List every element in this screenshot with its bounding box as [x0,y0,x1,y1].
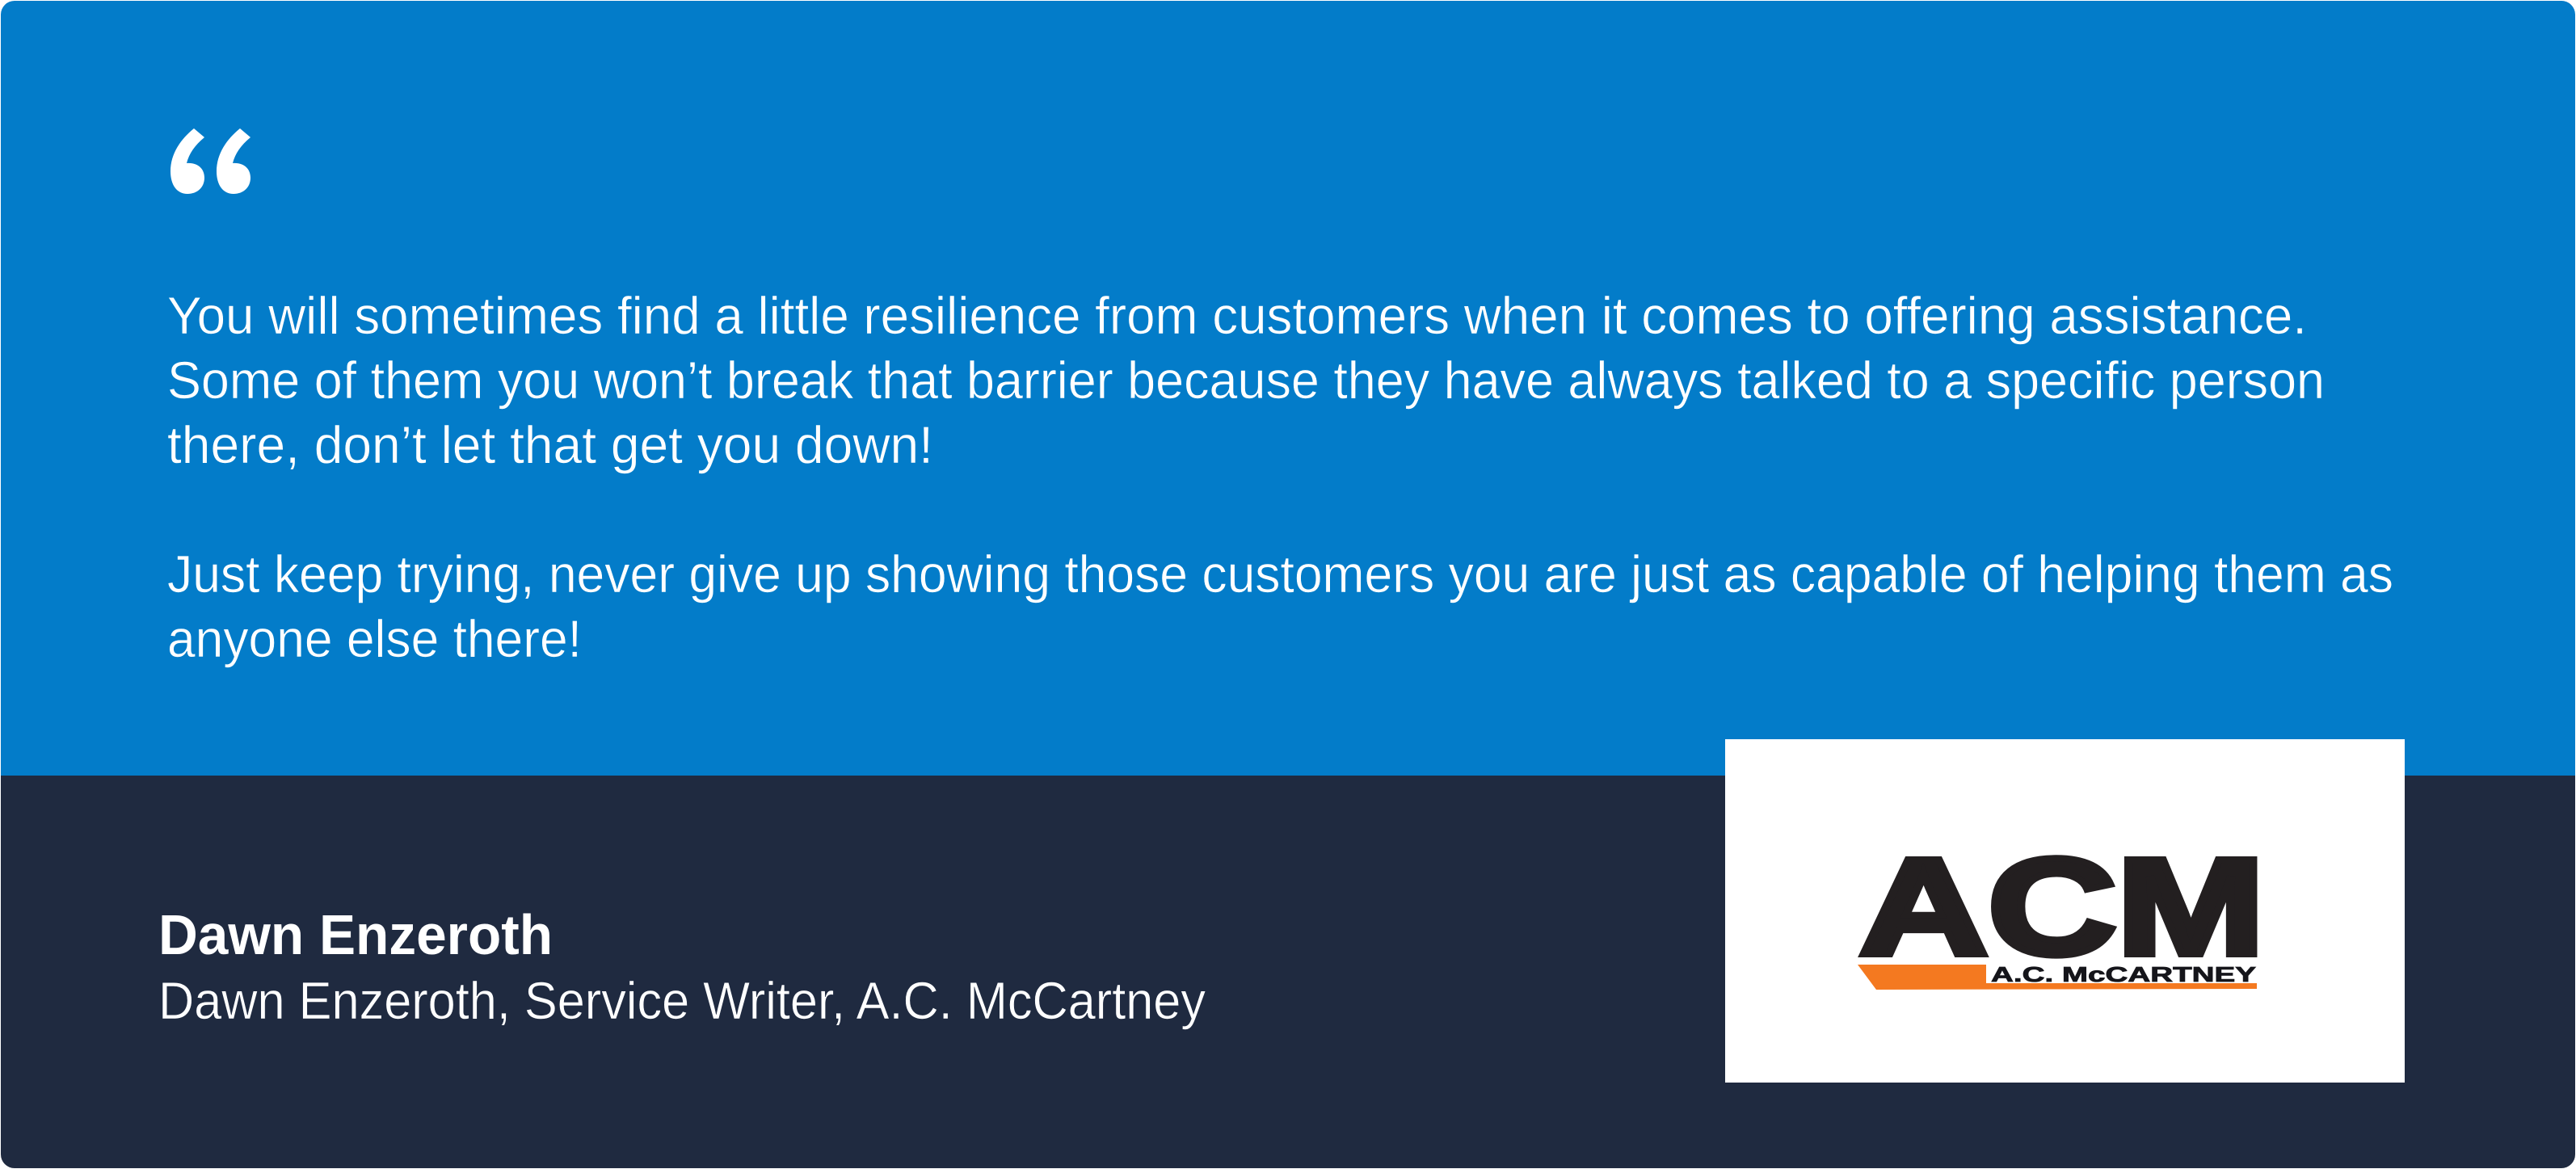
logo orange bar [1858,965,2257,990]
logo background [1725,739,2405,1083]
logo name: A.C. McCartney: A.C. McCARTNEY [1991,962,2256,986]
logo wordmark: ACM: ACM [1859,830,2265,984]
logo: A.C. McCartney [1725,739,2405,1083]
attribution name: Dawn Enzeroth [158,903,553,966]
panel: attribution background [0,776,2576,1169]
attribution role: Dawn Enzeroth, Service Writer, A.C. McCartney [158,971,1206,1030]
quote text: Just keep trying, never give up showing those customers you are just as capable of helping them as [167,545,2393,603]
panel: quote background [0,0,2576,776]
quote text: there, don’t let that get you down! [167,415,933,474]
quote text: anyone else there! [167,609,582,668]
quote text: Some of them you won’t break that barrier because they have always talked to a specific person [167,351,2325,410]
quote text [167,286,2393,668]
quote text: You will sometimes find a little resilience from customers when it comes to offering assistance. [167,286,2307,345]
icon: opening quotation mark [170,128,250,194]
